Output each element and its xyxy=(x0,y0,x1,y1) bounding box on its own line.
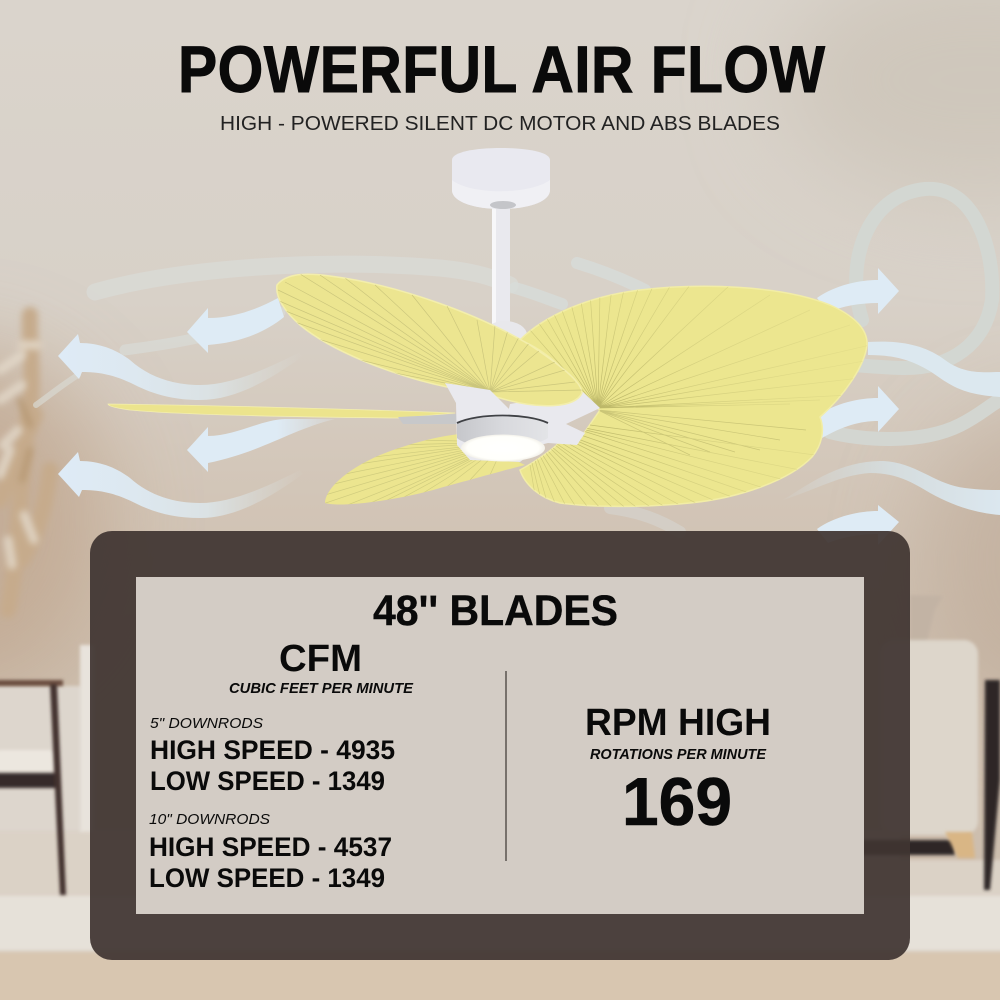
wave: right lower xyxy=(783,461,1000,515)
5 inch downrods label: 5" DOWNRODS xyxy=(150,715,263,732)
fan blade: lower left xyxy=(320,434,525,510)
blades heading: 48'' BLADES xyxy=(373,587,618,635)
swirl: lower right band xyxy=(830,400,1000,439)
swirl: top right curl xyxy=(835,189,992,368)
column divider xyxy=(505,671,507,861)
wave: right upper xyxy=(868,342,1000,397)
RPM heading: RPM HIGH xyxy=(585,702,771,744)
LED light xyxy=(461,434,545,462)
swirl: mid left band xyxy=(125,312,280,350)
5 inch high speed: HIGH SPEED - 4935 xyxy=(150,735,395,765)
arrow: right upper xyxy=(817,268,899,314)
subtitle: HIGH - POWERED SILENT DC MOTOR AND ABS BLADES xyxy=(220,112,780,135)
CFM column xyxy=(149,638,414,893)
swirl: centre bands xyxy=(515,263,645,304)
pampas grass decor xyxy=(0,315,50,610)
swirl: top left band xyxy=(95,264,510,292)
10 inch downrods label: 10" DOWNRODS xyxy=(149,811,270,828)
fan blade: flat left xyxy=(108,404,455,418)
CFM definition: CUBIC FEET PER MINUTE xyxy=(229,680,414,697)
arrow: left upper xyxy=(187,298,284,353)
swirl: lower centre band xyxy=(610,508,680,532)
motor housing xyxy=(445,383,548,462)
spec panel backdrop xyxy=(90,531,910,960)
dark ring xyxy=(457,416,548,423)
RPM value: 169 xyxy=(622,764,732,840)
CFM heading: CFM xyxy=(279,638,362,680)
fan downrod xyxy=(492,204,510,334)
fan blade: big right pair xyxy=(520,282,870,510)
10 inch low speed: LOW SPEED - 1349 xyxy=(149,863,385,893)
upper bracket xyxy=(445,383,548,462)
blade arm xyxy=(398,414,458,424)
fan blade: upper left xyxy=(277,274,582,406)
arrow: right middle xyxy=(817,386,899,438)
fan canopy xyxy=(452,148,550,209)
arrow: left lower xyxy=(187,419,335,472)
arrow and wave: far left upper xyxy=(58,334,303,400)
rug and floor xyxy=(0,825,1000,1000)
arrow: right lower xyxy=(817,505,899,545)
silver body xyxy=(457,417,548,447)
ceiling fan xyxy=(108,148,870,510)
right sofa and chair xyxy=(860,640,1000,890)
RPM column xyxy=(585,702,771,840)
blade bracket: right xyxy=(505,392,600,450)
5 inch low speed: LOW SPEED - 1349 xyxy=(150,766,385,796)
arrow and wave: far left lower xyxy=(58,452,303,518)
RPM definition: ROTATIONS PER MINUTE xyxy=(590,746,767,763)
motor top housing xyxy=(483,321,527,349)
10 inch high speed: HIGH SPEED - 4537 xyxy=(149,832,392,862)
title: POWERFUL AIR FLOW xyxy=(178,33,825,107)
airflow swirls behind fan xyxy=(36,189,1000,532)
swirl: far left tail xyxy=(36,375,78,405)
spec panel card xyxy=(136,577,864,914)
left sofa and chair xyxy=(0,645,94,895)
right wall ornament xyxy=(910,595,943,650)
